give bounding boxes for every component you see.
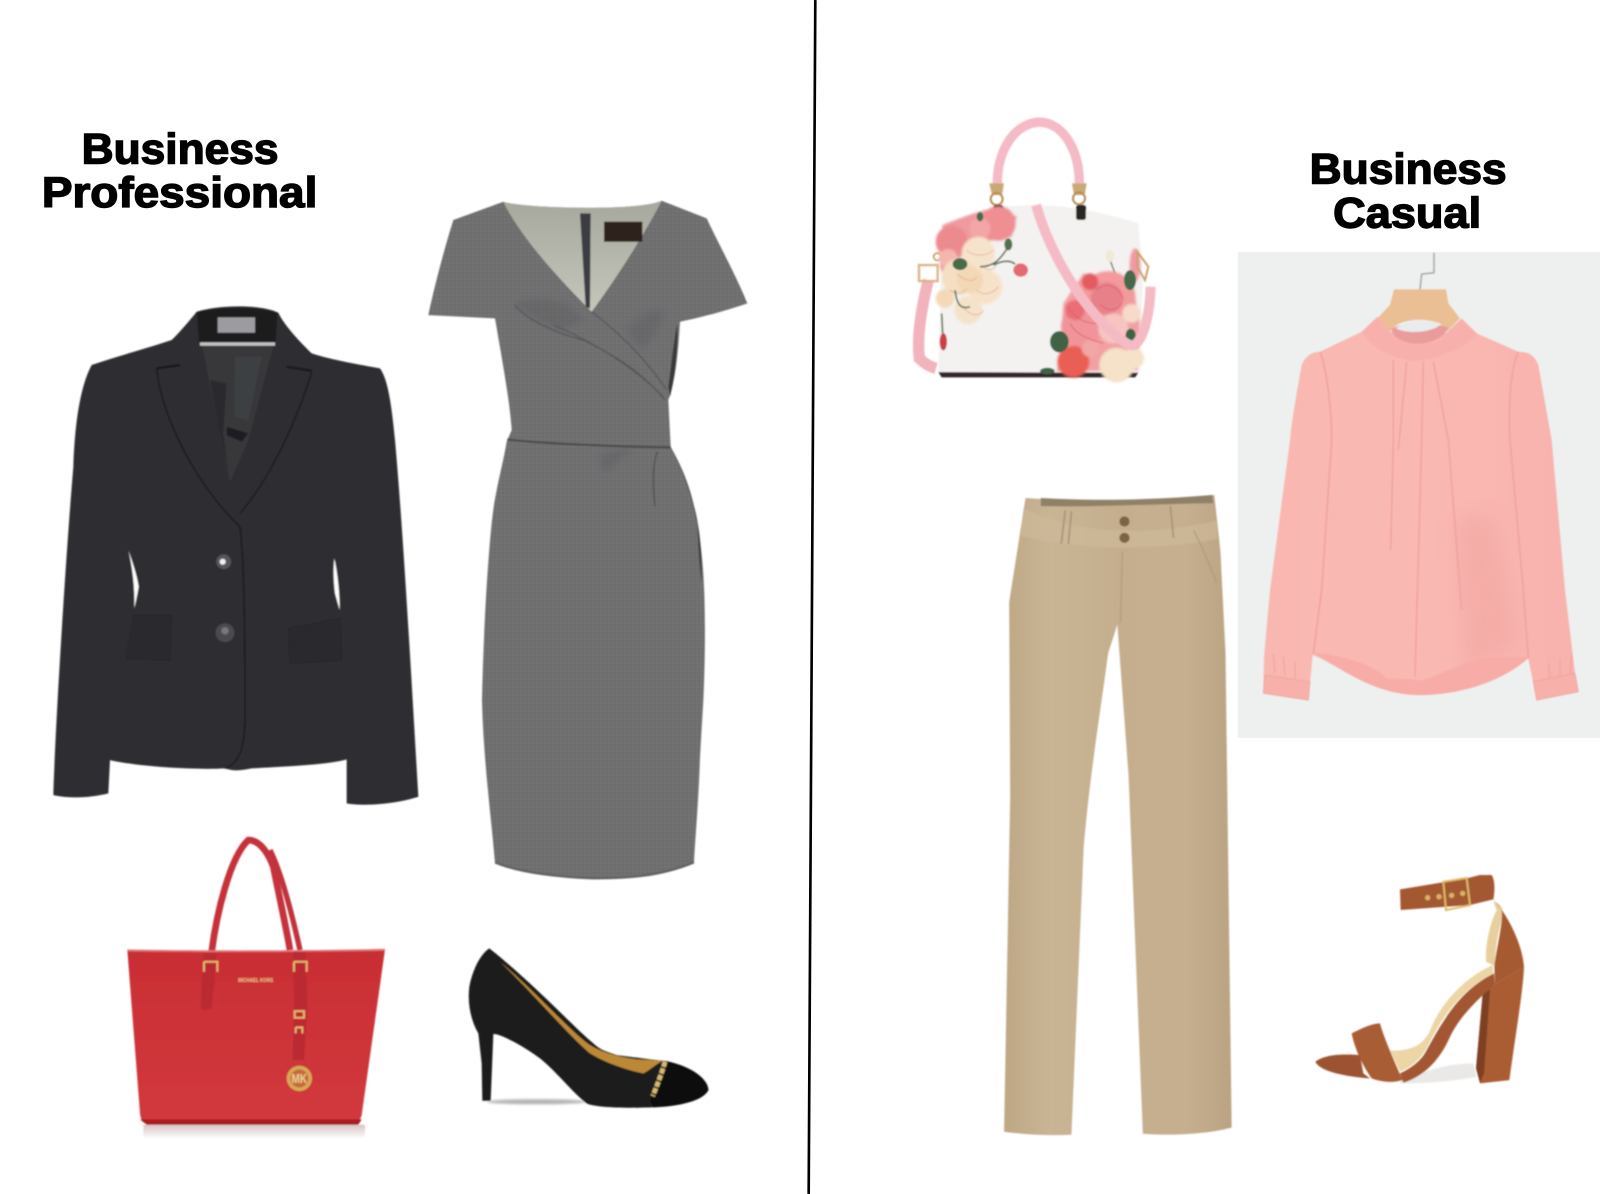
rose petal lines bbox=[1068, 285, 1123, 343]
tan block-heel sandal bbox=[1315, 875, 1524, 1083]
grey wrap dress bbox=[428, 201, 747, 878]
front edge bbox=[225, 527, 245, 768]
bag body bbox=[938, 205, 1143, 373]
ankle strap bbox=[1400, 875, 1494, 910]
black blazer bbox=[53, 306, 418, 805]
waist seam bbox=[507, 439, 671, 447]
waistband shadow bbox=[1041, 495, 1213, 506]
collar inside bbox=[197, 308, 278, 342]
heading: Business Professional bbox=[42, 125, 317, 217]
central soft shadow bbox=[1457, 517, 1517, 670]
lining bbox=[503, 201, 662, 312]
soft shadow bbox=[1400, 1063, 1477, 1083]
left flowers bbox=[936, 206, 1017, 324]
cuffs bbox=[1263, 675, 1310, 700]
strap tabs bbox=[201, 953, 217, 1010]
gold chain bbox=[653, 1062, 665, 1096]
cream lining bbox=[1486, 902, 1503, 966]
left leaves and stems bbox=[942, 247, 1015, 333]
cuff gathers bbox=[1273, 653, 1572, 678]
block heel bbox=[1476, 967, 1524, 1083]
heading: Business Professional: Professional bbox=[42, 169, 317, 217]
toe cap bbox=[650, 1062, 708, 1107]
heel counter bbox=[1493, 898, 1524, 984]
waist gaps bbox=[128, 550, 139, 608]
floral handbag bbox=[919, 122, 1151, 382]
pleats bbox=[1391, 360, 1462, 677]
red tote bag bbox=[127, 840, 385, 1139]
wrap folds bbox=[515, 305, 667, 400]
pockets bbox=[125, 615, 172, 660]
crossbody strap bbox=[1036, 205, 1151, 345]
bust shading bbox=[515, 299, 583, 330]
black tabs bbox=[993, 205, 1003, 218]
neck opening bbox=[1391, 323, 1448, 344]
zipper bbox=[580, 213, 591, 308]
handle bbox=[997, 122, 1079, 185]
gold buckles bbox=[204, 962, 307, 1033]
shadow bbox=[487, 1099, 587, 1104]
panel: business casual bbox=[919, 122, 1600, 1135]
heading: Business Casual bbox=[1310, 146, 1507, 238]
lapels bbox=[157, 365, 312, 371]
base bbox=[938, 372, 1138, 377]
buttons bbox=[216, 554, 231, 569]
buttons bbox=[1119, 516, 1130, 527]
black high-heel pump bbox=[469, 948, 708, 1108]
fly and pockets bbox=[1120, 531, 1216, 623]
sleeve seams bbox=[1313, 352, 1332, 653]
heading: Business Casual: Casual bbox=[1333, 190, 1481, 238]
MK charm bbox=[287, 1066, 312, 1091]
right hardware bbox=[1137, 252, 1148, 280]
bag body bbox=[127, 949, 385, 1123]
heading: Business Casual: Business bbox=[1310, 146, 1507, 194]
right roses bbox=[1057, 248, 1144, 382]
hip pleats bbox=[653, 452, 657, 507]
handles bbox=[212, 840, 290, 952]
khaki trousers bbox=[1004, 495, 1232, 1135]
brand label: MICHAEL KORS bbox=[238, 978, 274, 984]
heading: Business Professional: Business bbox=[82, 125, 279, 173]
hem band bbox=[1313, 653, 1528, 695]
cream shank bbox=[1390, 965, 1493, 1072]
toe strap bbox=[1352, 1023, 1403, 1082]
blouse body bbox=[1263, 332, 1578, 700]
pink blouse on grey background bbox=[1238, 252, 1600, 738]
lining bbox=[202, 346, 273, 482]
gold buckle bbox=[1443, 878, 1470, 910]
strap holes bbox=[1425, 895, 1430, 900]
collar bbox=[1362, 317, 1477, 361]
center divider line bbox=[809, 0, 815, 1194]
left side strap bbox=[919, 280, 936, 368]
belt loops bbox=[1061, 506, 1173, 544]
panel: business professional bbox=[42, 125, 747, 1139]
sleeve body shadows bbox=[668, 323, 678, 397]
left flower petal lines bbox=[947, 218, 1010, 315]
wooden hanger bbox=[1377, 289, 1460, 332]
hem bbox=[495, 862, 694, 878]
hanger wire bbox=[1420, 253, 1434, 289]
toe sole bbox=[1315, 1054, 1370, 1078]
tan insole bbox=[500, 962, 663, 1073]
reflection bbox=[143, 1125, 365, 1139]
dress label bbox=[604, 222, 642, 242]
right leaves bbox=[1050, 331, 1069, 352]
MK charm: MK bbox=[292, 1072, 308, 1086]
rose buds bbox=[1013, 263, 1028, 277]
brown shank bbox=[1400, 973, 1495, 1083]
